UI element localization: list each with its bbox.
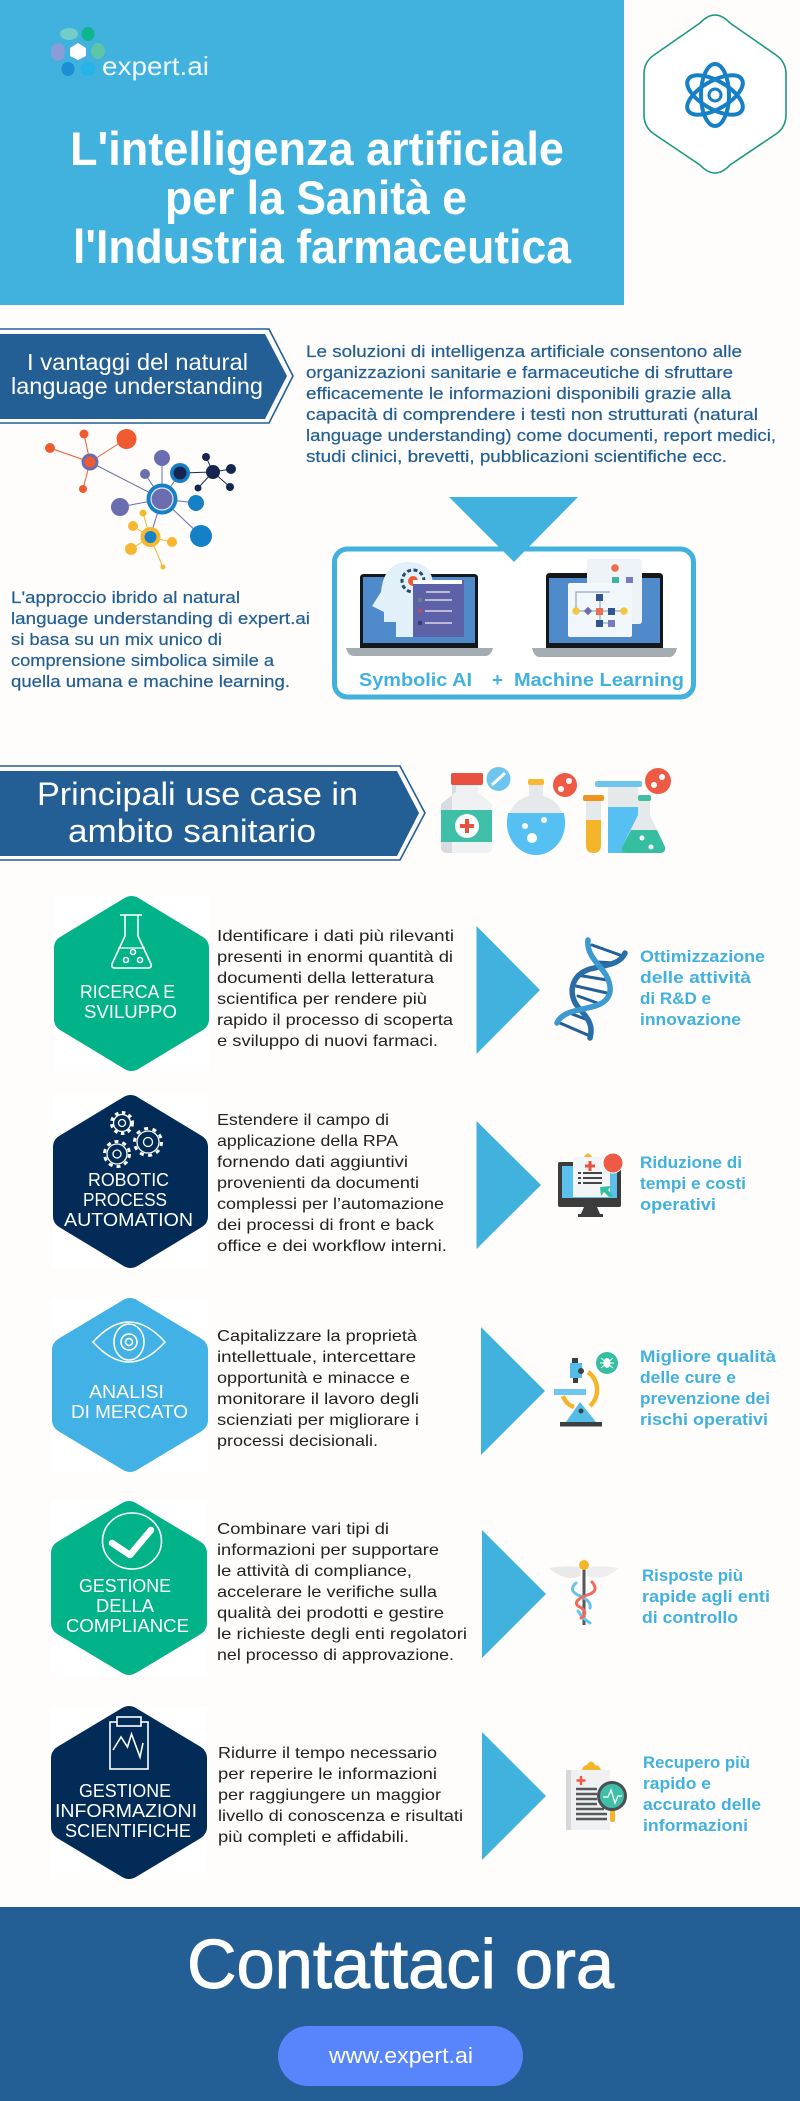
panel: header [0, 0, 624, 305]
text block: approccio ibrido: language understanding di expert.ai [11, 610, 310, 628]
text block: soluzioni di intelligenza artificiale: organizzazioni sanitarie e farmaceutiche di sfruttare [306, 364, 733, 382]
outcome: Risposte più [642, 1567, 743, 1585]
button: www.expert.ai: www.expert.ai [328, 2043, 473, 2068]
outcome: accurato delle [643, 1796, 761, 1814]
description: Combinare vari tipi di [217, 1521, 389, 1538]
outcome: Ottimizzazione [640, 948, 765, 966]
description [217, 1521, 467, 1664]
label: Symbolic AI + Machine Learning: + [492, 670, 503, 690]
hexagon: analisi di mercato: DI MERCATO [71, 1401, 188, 1422]
description: complessi per l’automazione [217, 1196, 444, 1213]
hexagon: robotic process automation [53, 1095, 208, 1268]
text block: soluzioni di intelligenza artificiale: Le soluzioni di intelligenza artificiale consentono alle [306, 343, 742, 361]
text block: approccio ibrido [11, 589, 310, 691]
hexagon: gestione informazioni scientifiche: INFORMAZIONI [55, 1800, 197, 1821]
description [217, 1112, 447, 1255]
icon: laptop with head and book [346, 562, 493, 656]
banner: I vantaggi del natural language understanding [0, 329, 293, 423]
outcome: rapido e [643, 1775, 711, 1793]
description [217, 928, 454, 1050]
hexagon: ricerca e sviluppo: SVILUPPO [84, 1001, 177, 1022]
banner: Principali use case in ambito sanitario [0, 766, 425, 860]
icon: DNA [557, 940, 625, 1038]
outcome: Riduzione di [640, 1154, 742, 1172]
icon: clipboard with magnifier [566, 1762, 626, 1830]
icon: molecule network [45, 429, 236, 570]
hexagon: robotic process automation: AUTOMATION [64, 1209, 193, 1230]
text block: approccio ibrido: comprensione simbolica simile a [11, 652, 275, 670]
description: provenienti da documenti [217, 1175, 419, 1192]
text block: soluzioni di intelligenza artificiale: efficacemente le informazioni disponibili grazie alla [306, 385, 732, 403]
label: Symbolic AI + Machine Learning: Machine Learning [514, 670, 684, 690]
icon: monitor with report [558, 1153, 623, 1217]
arrow [482, 1732, 546, 1860]
outcome: rischi operativi [640, 1411, 768, 1429]
banner: Principali use case in ambito sanitario: Principali use case in [37, 776, 358, 812]
description: nel processo di approvazione. [217, 1647, 454, 1664]
description: accelerare le verifiche sulla [217, 1584, 437, 1601]
panel: Symbolic AI + Machine Learning [334, 549, 694, 697]
text block: soluzioni di intelligenza artificiale [306, 343, 776, 466]
text block: soluzioni di intelligenza artificiale: capacità di comprendere i testi non strutturati (natural [306, 406, 758, 424]
outcome: prevenzione dei [640, 1390, 770, 1408]
description: per raggiungere un maggior [218, 1787, 442, 1804]
arrow: down triangle [449, 497, 578, 562]
outcome: operativi [640, 1196, 716, 1214]
icon: laptop with flow charts [532, 559, 677, 657]
description: Identificare i dati più rilevanti [217, 928, 454, 945]
arrow [482, 1530, 546, 1658]
icon: medicine bottle and lab flasks [441, 767, 671, 855]
row 1: ricerca e sviluppo [54, 896, 765, 1071]
hexagon: gestione della compliance [51, 1501, 207, 1675]
description: Capitalizzare la proprietà [217, 1328, 417, 1345]
description: informazioni per supportare [217, 1542, 439, 1559]
hexagon: gestione della compliance: COMPLIANCE [66, 1615, 189, 1636]
label: Symbolic AI + Machine Learning: Symbolic AI [359, 670, 472, 690]
hexagon: gestione informazioni scientifiche: GESTIONE [79, 1780, 171, 1801]
hexagon: analisi di mercato: ANALISI [89, 1381, 164, 1402]
description: e sviluppo di nuovi farmaci. [217, 1033, 438, 1050]
panel: footer [0, 1907, 800, 2101]
description: dei processi di front e back [217, 1217, 435, 1234]
icon: microscope [554, 1352, 618, 1426]
hexagon: gestione informazioni scientifiche: SCIENTIFICHE [65, 1820, 191, 1841]
title [70, 122, 572, 273]
row 2: robotic process automation [53, 1095, 746, 1268]
arrow [476, 1121, 541, 1249]
hexagon: gestione della compliance: DELLA [96, 1595, 155, 1616]
description: rapido il processo di scoperta [217, 1012, 453, 1029]
description: fornendo dati aggiuntivi [217, 1154, 408, 1171]
text block: soluzioni di intelligenza artificiale: language understanding) come documenti, report medici, [306, 427, 776, 445]
hexagon: robotic process automation: PROCESS [83, 1189, 167, 1210]
description: monitorare il lavoro degli [217, 1391, 419, 1408]
outcome [640, 1154, 746, 1214]
description: scienziati per migliorare i [217, 1412, 419, 1429]
banner: I vantaggi del natural language understanding: language understanding [11, 373, 263, 399]
outcome [640, 1348, 777, 1429]
text block: soluzioni di intelligenza artificiale: studi clinici, brevetti, pubblicazioni scientifiche ecc. [306, 448, 727, 466]
banner: I vantaggi del natural language understanding: I vantaggi del natural [27, 349, 248, 375]
description: qualità dei prodotti e gestire [217, 1605, 444, 1622]
hexagon: analisi di mercato [52, 1298, 208, 1472]
description: scientifica per rendere più [217, 991, 427, 1008]
outcome: innovazione [640, 1011, 741, 1029]
row 4: gestione della compliance [51, 1501, 770, 1675]
outcome: Recupero più [643, 1754, 750, 1772]
row 3: analisi di mercato [52, 1298, 777, 1472]
outcome: rapide agli enti [642, 1588, 770, 1606]
outcome [640, 948, 765, 1029]
outcome: informazioni [643, 1817, 748, 1835]
outcome [642, 1567, 770, 1627]
outcome [643, 1754, 761, 1835]
description: livello di conoscenza e risultati [218, 1808, 463, 1825]
outcome: Migliore qualità [640, 1348, 777, 1366]
icon: atom in hexagon [644, 15, 786, 173]
title: L'intelligenza artificiale [70, 122, 564, 175]
logo: expert.ai [51, 27, 209, 81]
arrow [476, 926, 540, 1054]
hexagon: gestione della compliance: GESTIONE [79, 1575, 171, 1596]
description: processi decisionali. [217, 1433, 378, 1450]
arrow [481, 1327, 545, 1455]
description: opportunità e minacce e [217, 1370, 410, 1387]
text block: approccio ibrido: si basa su un mix unico di [11, 631, 222, 649]
text block: approccio ibrido: L'approccio ibrido al natural [11, 589, 240, 607]
hexagon: robotic process automation: ROBOTIC [88, 1169, 169, 1190]
banner: Principali use case in ambito sanitario: ambito sanitario [68, 813, 316, 849]
outcome: di R&D e [640, 990, 711, 1008]
text block: approccio ibrido: quella umana e machine learning. [11, 673, 290, 691]
logo: expert.ai: expert.ai [102, 51, 209, 81]
description: le richieste degli enti regolatori [217, 1626, 467, 1643]
title: l'Industria farmaceutica [73, 220, 572, 273]
heading: Contattaci ora: Contattaci ora [187, 1925, 614, 2003]
hexagon: ricerca e sviluppo: RICERCA E [80, 981, 175, 1002]
icon: caduceus [549, 1560, 619, 1625]
description: per reperire le informazioni [218, 1766, 437, 1783]
description: applicazione della RPA [217, 1133, 398, 1150]
outcome: delle cure e [640, 1369, 736, 1387]
title: per la Sanità e [165, 171, 467, 224]
description: le attività di compliance, [217, 1563, 412, 1580]
description: Ridurre il tempo necessario [218, 1745, 437, 1762]
button: www.expert.ai [278, 2026, 523, 2086]
label: Symbolic AI + Machine Learning [359, 670, 684, 690]
hexagon: ricerca e sviluppo [54, 896, 209, 1071]
row 5: gestione informazioni scientifiche [51, 1706, 761, 1879]
description: documenti della letteratura [217, 970, 434, 987]
outcome: di controllo [642, 1609, 738, 1627]
description: Estendere il campo di [217, 1112, 389, 1129]
outcome: delle attività [640, 969, 752, 987]
outcome: tempi e costi [640, 1175, 746, 1193]
description: più completi e affidabili. [218, 1829, 409, 1846]
description: office e dei workflow interni. [217, 1238, 447, 1255]
description: presenti in enormi quantità di [217, 949, 453, 966]
description [217, 1328, 419, 1450]
description [218, 1745, 463, 1846]
description: intellettuale, intercettare [217, 1349, 416, 1366]
hexagon: gestione informazioni scientifiche [51, 1706, 207, 1879]
